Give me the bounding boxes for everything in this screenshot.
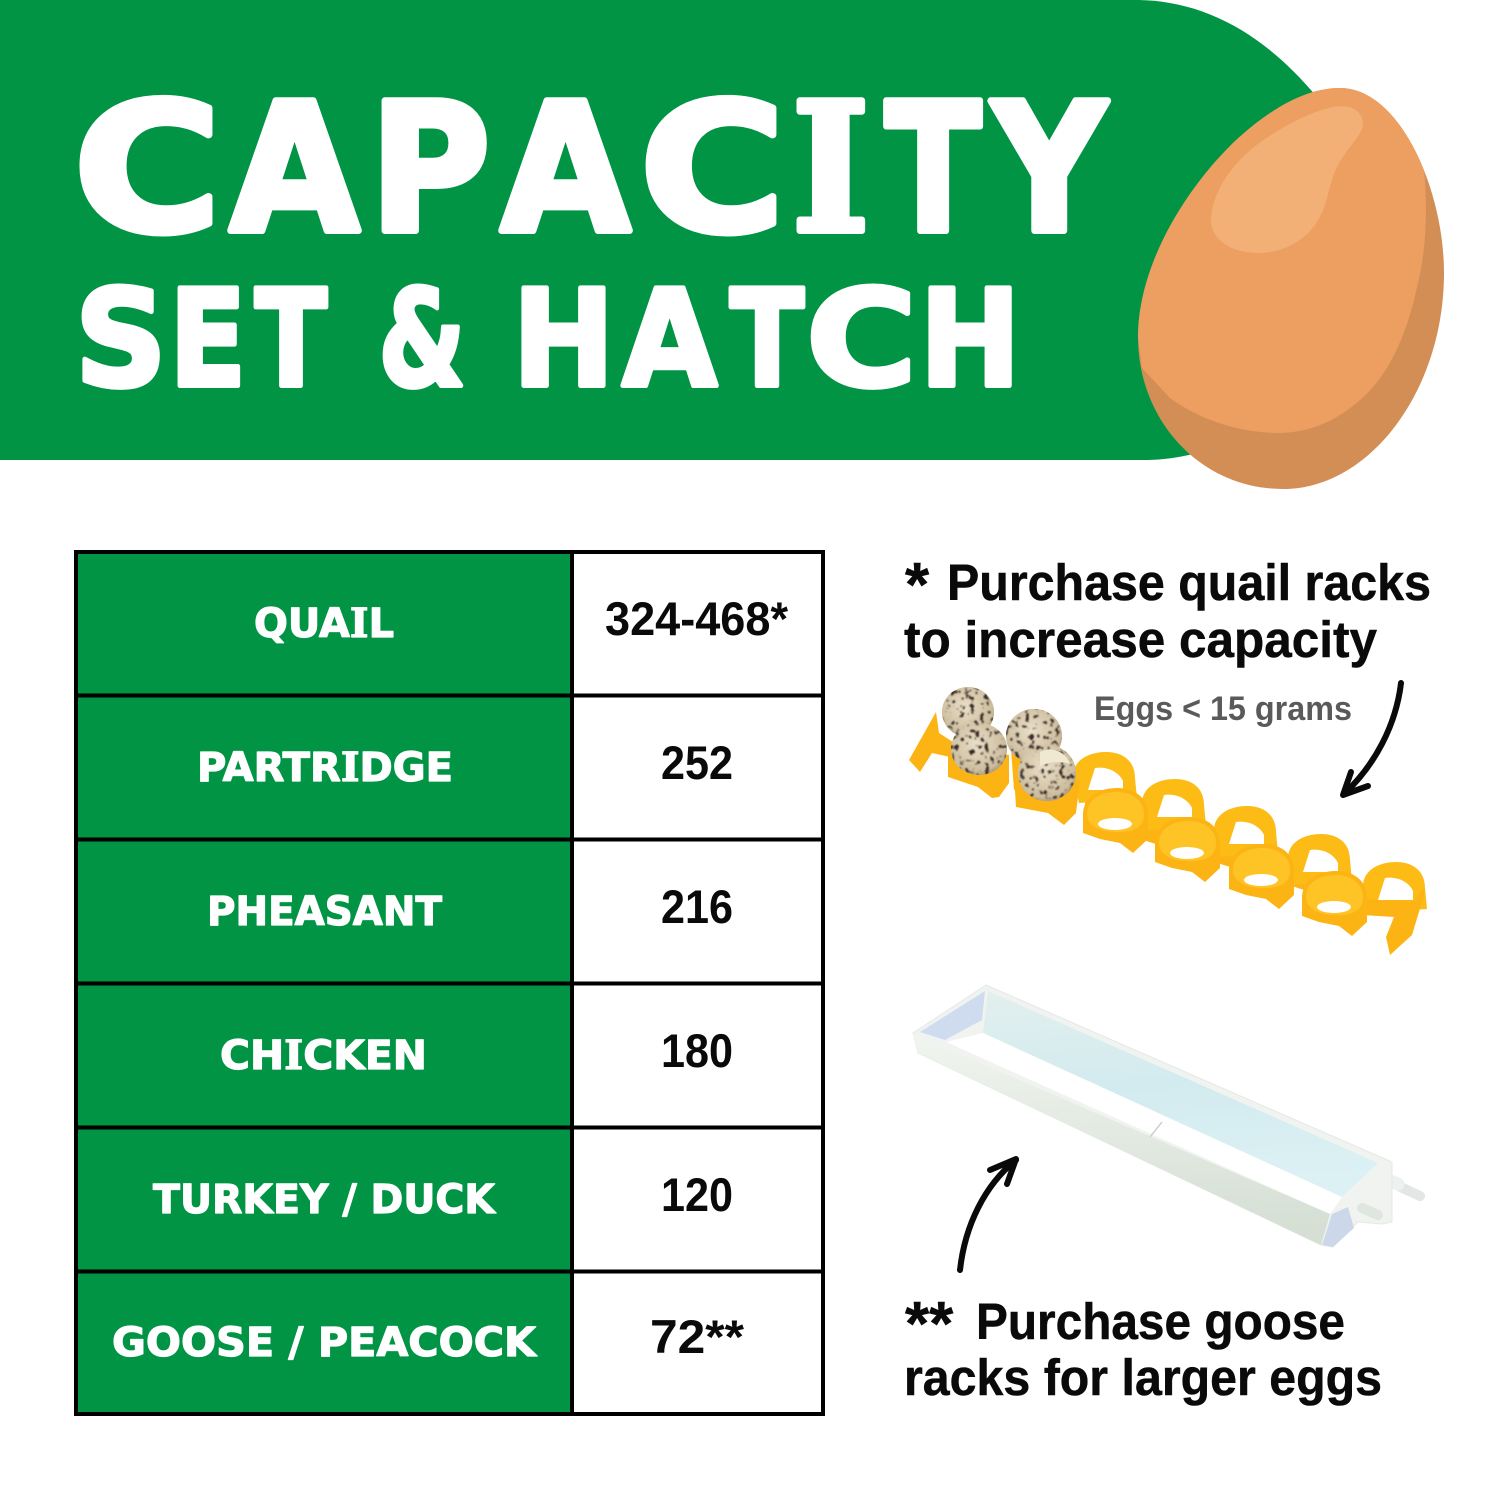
header banner <box>0 0 1316 460</box>
subtitle: SET & HATCH: C <box>806 262 917 418</box>
arrow: to quail rack <box>1343 683 1401 795</box>
image: white goose rack <box>913 985 1420 1247</box>
title: CAPACITY: P <box>370 66 490 272</box>
note: quail racks: to increase capacity <box>904 611 1378 668</box>
right tab <box>1362 888 1425 955</box>
subtitle: SET & HATCH: & <box>378 262 466 418</box>
row: pheasant: PHEASANT <box>207 889 443 935</box>
row: partridge <box>197 736 733 791</box>
icon: egg <box>1138 88 1444 489</box>
arrow: to goose rack <box>960 1159 1016 1270</box>
row: quail: 324-468* <box>605 592 789 645</box>
subtitle: SET & HATCH: H <box>512 262 614 418</box>
subtitle: SET & HATCH: T <box>730 262 804 418</box>
note: goose racks <box>904 1290 1382 1406</box>
row: partridge: PARTRIDGE <box>197 744 453 791</box>
row: chicken: CHICKEN <box>220 1032 427 1079</box>
image: yellow quail egg rack <box>909 687 1427 955</box>
subtitle: SET & HATCH: A <box>622 262 717 418</box>
note: goose racks: racks for larger eggs <box>904 1349 1382 1406</box>
row: partridge: 252 <box>661 736 733 789</box>
row: goose / peacock <box>112 1310 745 1366</box>
note: quail racks <box>904 551 1431 668</box>
row: quail <box>254 592 789 647</box>
title: CAPACITY: A <box>501 66 630 272</box>
title: CAPACITY: Y <box>990 66 1108 272</box>
title: CAPACITY: C <box>73 66 221 272</box>
quail eggs <box>942 687 1076 801</box>
connecting band <box>1085 800 1400 915</box>
title: CAPACITY: A <box>230 66 359 272</box>
row: chicken <box>220 1024 733 1079</box>
table: capacity by bird type <box>76 552 823 1414</box>
subtitle: SET & HATCH: T <box>255 262 327 418</box>
title: CAPACITY: T <box>885 66 981 272</box>
row: pheasant <box>207 880 733 935</box>
highlight on front egg <box>1040 750 1070 766</box>
row: pheasant: 216 <box>661 880 733 933</box>
row: turkey / duck: 120 <box>661 1168 733 1221</box>
row: goose / peacock: 72** <box>650 1310 745 1363</box>
row: chicken: 180 <box>661 1024 733 1077</box>
row: quail: QUAIL <box>254 600 394 647</box>
subtitle: SET & HATCH: H <box>920 262 1021 418</box>
goose rack nozzle <box>1386 1179 1420 1196</box>
subtitle: SET & HATCH: E <box>169 262 246 418</box>
note: goose racks: ** <box>905 1290 954 1359</box>
label: eggs under 15 grams: Eggs < 15 grams <box>1094 690 1352 728</box>
left tab <box>909 712 953 772</box>
row: turkey / duck: TURKEY / DUCK <box>153 1177 497 1223</box>
title: CAPACITY: I <box>792 64 870 272</box>
yellow cups holding eggs <box>948 745 1009 798</box>
note: goose racks: Purchase goose <box>976 1293 1345 1350</box>
note: quail racks: * <box>905 551 930 620</box>
note: quail racks: Purchase quail racks <box>947 554 1431 611</box>
title: CAPACITY: C <box>640 66 785 272</box>
row: turkey / duck <box>153 1168 733 1223</box>
subtitle: SET & HATCH: S <box>75 262 167 418</box>
row: goose / peacock: GOOSE / PEACOCK <box>112 1320 538 1366</box>
